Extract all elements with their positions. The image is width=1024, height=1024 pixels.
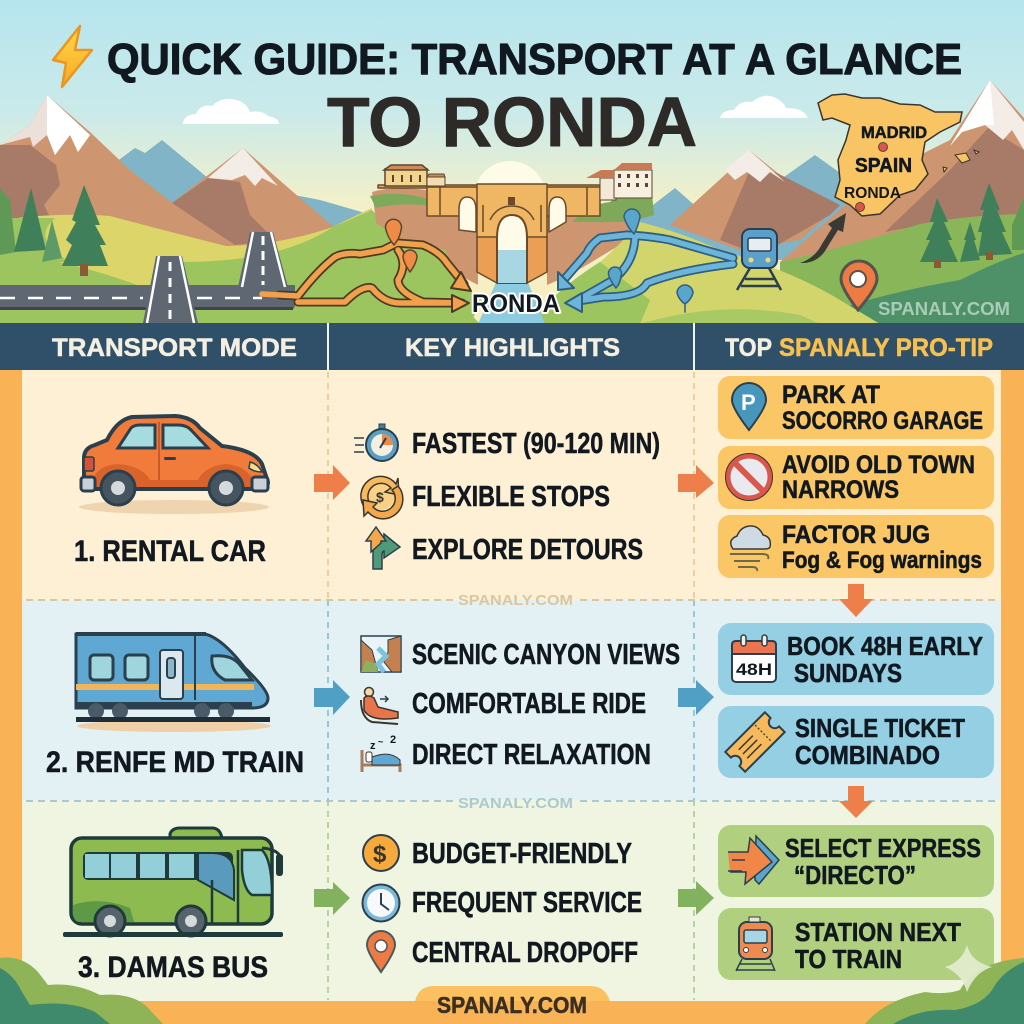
icon: canyon: [361, 636, 401, 672]
tip: book 48h early sundays: 48H: [736, 660, 772, 679]
label: Ronda on map: RONDA: [844, 185, 901, 202]
label: damas bus: 3. DAMAS BUS: [78, 951, 268, 984]
mountain far right: [780, 80, 1024, 280]
icon: bed: [362, 734, 400, 772]
tip: park at socorro garage: P: [741, 390, 756, 415]
icon: lightning bolt: [53, 26, 92, 87]
icon: detours: [366, 527, 400, 569]
arrow: down to row 3: [839, 786, 873, 818]
tip: park at socorro garage: PARK AT: [782, 381, 880, 409]
label: Ronda destination: RONDA: [472, 290, 560, 318]
tip: select express directo: “DIRECTO”: [794, 860, 916, 890]
decoration: sparkle: [945, 945, 992, 992]
tip: factor jug fog warnings: FACTOR JUG: [782, 521, 930, 549]
arrow: train highlights to tips: [678, 680, 714, 715]
arrow: car to highlights: [314, 465, 350, 500]
icon: stopwatch: [354, 424, 398, 461]
tip: single ticket combinado: SINGLE TICKET: [795, 713, 965, 743]
text: budget-friendly: BUDGET-FRIENDLY: [412, 838, 632, 870]
arrow: car highlights to tips: [678, 465, 714, 498]
tip: factor jug fog warnings: Fog & Fog warnings: [782, 547, 982, 574]
heading: spanaly pro-tip: SPANALY PRO-TIP: [779, 334, 993, 362]
river: [478, 280, 545, 324]
icon: bus: [63, 828, 283, 937]
text: flexible stops: FLEXIBLE STOPS: [412, 481, 610, 513]
icon: train front: [737, 229, 781, 290]
tip: avoid old town narrows: [718, 446, 994, 509]
mountain far left: [0, 95, 226, 260]
tip: station next to train: TO TRAIN: [795, 944, 902, 974]
hills right: [780, 214, 1024, 324]
cloud right: [720, 96, 808, 118]
arrow: train to highlights: [314, 680, 350, 715]
hills left: [0, 208, 372, 324]
building right: [586, 163, 652, 200]
label: rental car: 1. RENTAL CAR: [74, 535, 266, 568]
mountain centre left: [172, 148, 335, 250]
panel: train pro tips: [718, 623, 994, 778]
footer text: SPANALY.COM: [437, 992, 587, 1018]
banner: landscape illustration: [0, 0, 1024, 324]
map of Spain: [818, 94, 979, 216]
title line 2: TO RONDA: [327, 83, 697, 161]
text: direct relaxation: DIRECT RELAXATION: [412, 739, 651, 771]
tip: single ticket combinado: COMBINADO: [795, 740, 940, 770]
trees left: [0, 185, 108, 276]
roads: [0, 232, 295, 323]
tip: avoid old town narrows: NARROWS: [782, 476, 899, 504]
panel: bus mode: [63, 828, 283, 984]
tip: station next to train: [718, 908, 994, 980]
icon: car: [79, 416, 269, 514]
icon: flexible stops: $: [376, 489, 384, 505]
text: fastest: FASTEST (90-120 MIN): [412, 428, 660, 460]
watermark row 1: SPANALY.COM: [458, 592, 573, 609]
arrow to map: [800, 213, 846, 263]
header bar: [0, 323, 1024, 370]
title line 1: QUICK GUIDE: TRANSPORT AT A GLANCE: [107, 35, 962, 84]
panel: bus highlights: [362, 835, 642, 972]
arrow: down to row 2: [839, 584, 873, 617]
building left: [384, 165, 445, 186]
panel: train mode: [46, 632, 304, 779]
panel: rental car mode: [74, 416, 269, 568]
tip: factor jug fog warnings: [718, 515, 994, 578]
decoration: bush bottom right: [865, 958, 1024, 1024]
car route arrows: [262, 219, 471, 312]
icon: train: [76, 632, 271, 732]
footer pill: [0, 986, 1024, 1024]
icon: dollar coin: $: [373, 841, 387, 868]
icon: comfortable seat: [361, 688, 398, 724]
row 3 background: [22, 800, 1001, 1001]
sun: [474, 161, 546, 233]
tip: book 48h early sundays: SUNDAYS: [794, 658, 902, 688]
icon: bed: z: [370, 740, 376, 752]
icon: map pin: [367, 931, 395, 972]
label: Spain: SPAIN: [855, 155, 912, 177]
panel: train highlights: [361, 636, 680, 772]
train route arrows: [558, 209, 733, 312]
tip: select express directo: [718, 825, 994, 897]
row 2 background: [22, 600, 1001, 800]
label: Madrid: MADRID: [861, 123, 927, 142]
text: frequent service: FREQUENT SERVICE: [412, 887, 642, 919]
bridge of Ronda: [378, 184, 600, 283]
panel: car pro tips: [718, 376, 994, 578]
panel: rental car highlights: [354, 424, 660, 569]
arrow: bus to highlights: [314, 882, 350, 915]
tip: park at socorro garage: SOCORRO GARAGE: [782, 407, 983, 435]
trees right: [920, 183, 1024, 268]
tip: station next to train: STATION NEXT: [795, 917, 961, 947]
watermark banner: SPANALY.COM: [878, 299, 1010, 319]
text: explore detours: EXPLORE DETOURS: [412, 534, 643, 566]
decoration: bush bottom left: [0, 958, 163, 1024]
tip: book 48h early sundays: BOOK 48H EARLY: [787, 631, 983, 661]
watermark row 2: SPANALY.COM: [458, 795, 573, 812]
icon: bed: 2: [390, 734, 396, 746]
icon: location pin: [841, 261, 877, 310]
label: renfe md train: 2. RENFE MD TRAIN: [46, 746, 304, 779]
page frame: [0, 370, 1024, 1024]
row 1 background: [22, 370, 1001, 600]
mountain centre right: [670, 150, 840, 250]
near hills: [300, 216, 482, 324]
icon: flexible stops: [361, 476, 403, 519]
tip: select express directo: SELECT EXPRESS: [785, 833, 981, 863]
text: comfortable ride: COMFORTABLE RIDE: [412, 688, 646, 720]
text: scenic canyon views: SCENIC CANYON VIEWS: [412, 639, 680, 671]
cloud left: [183, 99, 279, 124]
cliffs: [372, 188, 478, 285]
distant blue mountains: [112, 140, 860, 260]
panel: bus pro tips: [718, 825, 994, 980]
text: central dropoff: CENTRAL DROPOFF: [412, 937, 638, 969]
tip: avoid old town narrows: AVOID OLD TOWN: [782, 451, 975, 479]
tip: book 48h early sundays: [718, 623, 994, 695]
heading: transport mode: TRANSPORT MODE: [52, 334, 297, 362]
icon: bed: ~: [378, 737, 383, 747]
tip: single ticket combinado: [718, 706, 994, 778]
arrow: bus highlights to tips: [678, 881, 714, 915]
heading: key highlights: KEY HIGHLIGHTS: [405, 334, 620, 362]
icon: clock: [362, 884, 400, 922]
icon: dollar coin: [363, 835, 399, 871]
heading: top: TOP: [725, 334, 772, 362]
tip: park at socorro garage: [718, 376, 994, 439]
